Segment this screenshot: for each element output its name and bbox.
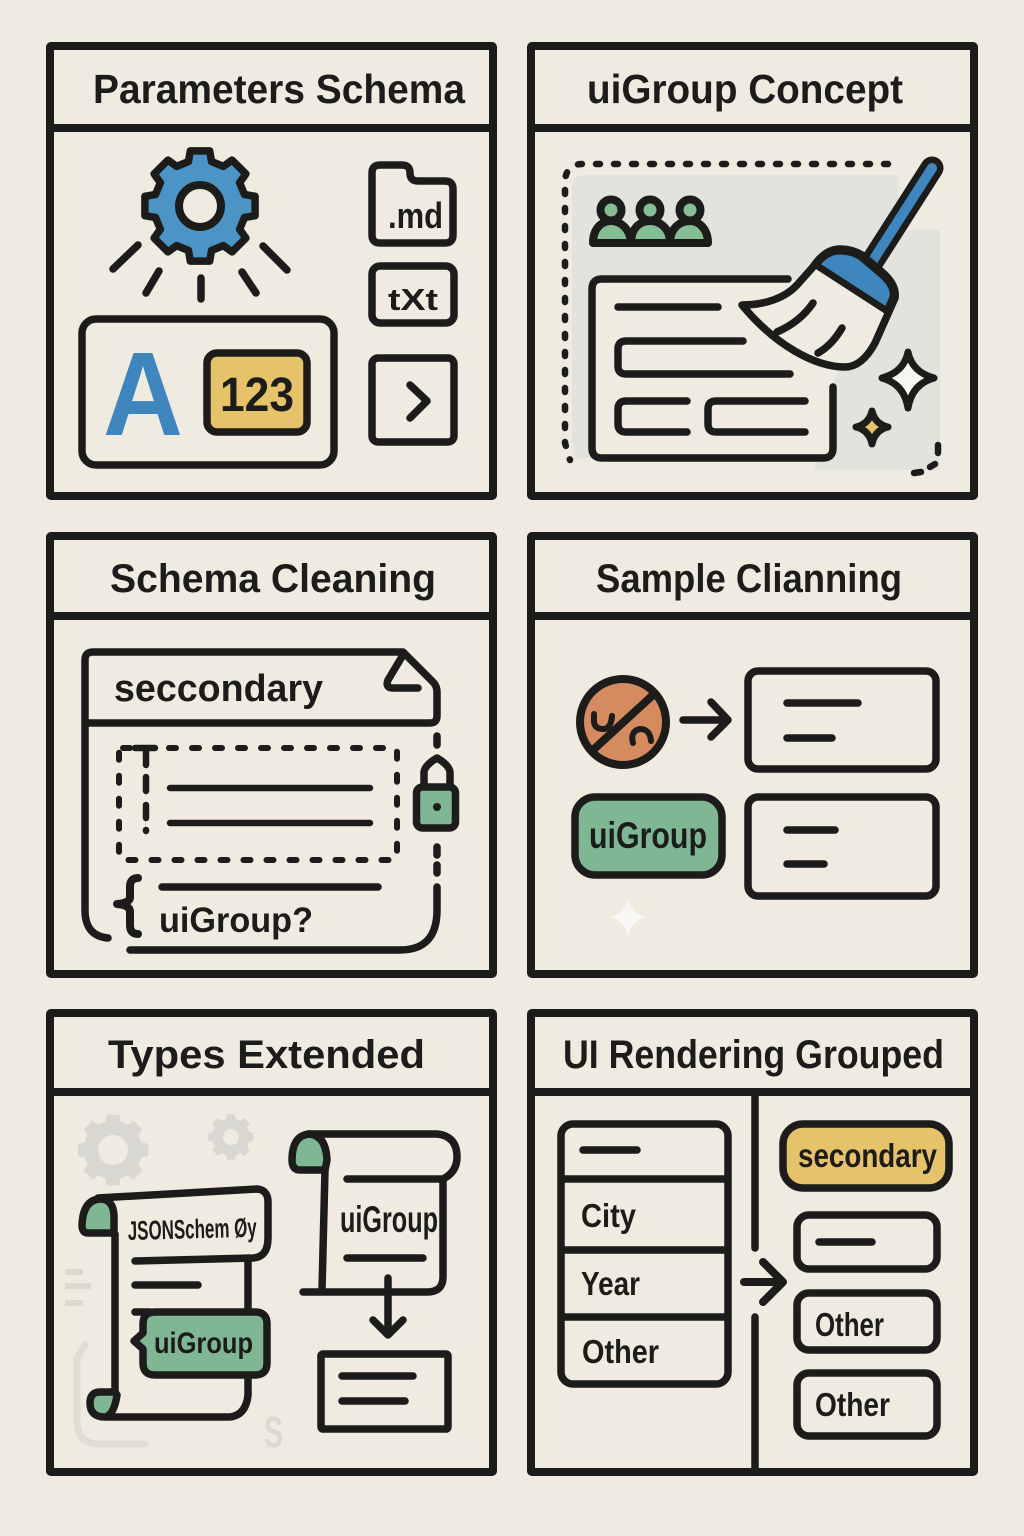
scroll: JSONSchema: JSONSchem Øy <box>127 1213 257 1246</box>
dashed selection outline <box>565 164 938 473</box>
badge: uiGroup tag <box>134 1312 267 1375</box>
arrow <box>683 702 728 737</box>
badge: uiGroup: uiGroup <box>589 815 707 856</box>
panel: Sample Clianning <box>531 536 974 974</box>
arrow: down <box>373 1278 403 1335</box>
grey highlight area <box>572 175 940 470</box>
field: Other: Other <box>815 1306 884 1343</box>
icon: curly brace <box>117 878 138 934</box>
icon: txt file <box>372 266 454 323</box>
icon: faint sparkle <box>609 898 647 937</box>
badge: uiGroup tag: uiGroup <box>154 1327 253 1360</box>
heading: Sample Clianning: Sample Clianning <box>596 557 902 601</box>
panel: Parameters Schema <box>50 46 493 496</box>
heading: UI Rendering Grouped: UI Rendering Grouped <box>563 1033 944 1077</box>
icon: gear <box>145 151 255 261</box>
document title: seccondary: seccondary <box>114 668 323 710</box>
card: top result <box>748 671 936 769</box>
scroll: uiGroup <box>292 1134 457 1292</box>
card: bottom result <box>748 797 936 896</box>
icon: .md file <box>372 165 453 243</box>
label: uiGroup?: uiGroup? <box>159 901 313 940</box>
scroll: uiGroup: uiGroup <box>340 1199 438 1240</box>
icon: chevron button <box>372 358 454 442</box>
badge: secondary: secondary <box>798 1137 938 1174</box>
heading: Types Extended: Types Extended <box>108 1033 425 1077</box>
icon: prohibited circle <box>580 679 666 765</box>
icon: padlock <box>416 758 456 828</box>
document outline <box>85 652 437 950</box>
form document <box>592 279 860 458</box>
icon: people group <box>593 200 708 243</box>
column divider <box>751 1092 759 1472</box>
panel: Types Extended <box>50 1013 493 1472</box>
icon: small sparkle <box>856 411 888 444</box>
icon: gear rays <box>113 245 287 299</box>
panel: uiGroup Concept <box>531 46 974 496</box>
badge: 123: 123 <box>220 369 294 422</box>
heading: Parameters Schema: Parameters Schema <box>93 66 466 112</box>
field: Other <box>797 1293 937 1350</box>
field list: ungrouped: Other <box>582 1333 659 1370</box>
badge: uiGroup <box>575 797 722 875</box>
card: output <box>321 1354 448 1429</box>
panel: Schema Cleaning <box>50 536 493 974</box>
faint background decorations <box>65 1114 283 1457</box>
heading: uiGroup Concept: uiGroup Concept <box>587 66 903 112</box>
badge: secondary <box>783 1124 949 1188</box>
field list: ungrouped: City <box>581 1197 637 1234</box>
type box: text and number <box>82 319 334 465</box>
field: Other second <box>797 1373 937 1436</box>
icon: .md file: .md <box>388 195 443 236</box>
field list: ungrouped: Year <box>581 1265 640 1302</box>
arrow: right <box>744 1262 783 1302</box>
panel: UI Rendering Grouped <box>531 1013 974 1472</box>
icon: txt file: tXt <box>388 282 438 317</box>
scroll: JSONSchema <box>82 1189 268 1417</box>
icon: large sparkle <box>882 352 934 408</box>
heading: Schema Cleaning: Schema Cleaning <box>110 557 436 601</box>
field: blank <box>797 1215 937 1269</box>
badge: 123 <box>207 353 307 432</box>
icon: broom <box>742 168 932 367</box>
field list: ungrouped <box>561 1124 728 1384</box>
field: Other second: Other <box>815 1386 890 1423</box>
dashed field group <box>119 748 397 860</box>
icon: letter A: A <box>103 328 183 461</box>
faint background decorations: S <box>264 1408 283 1457</box>
